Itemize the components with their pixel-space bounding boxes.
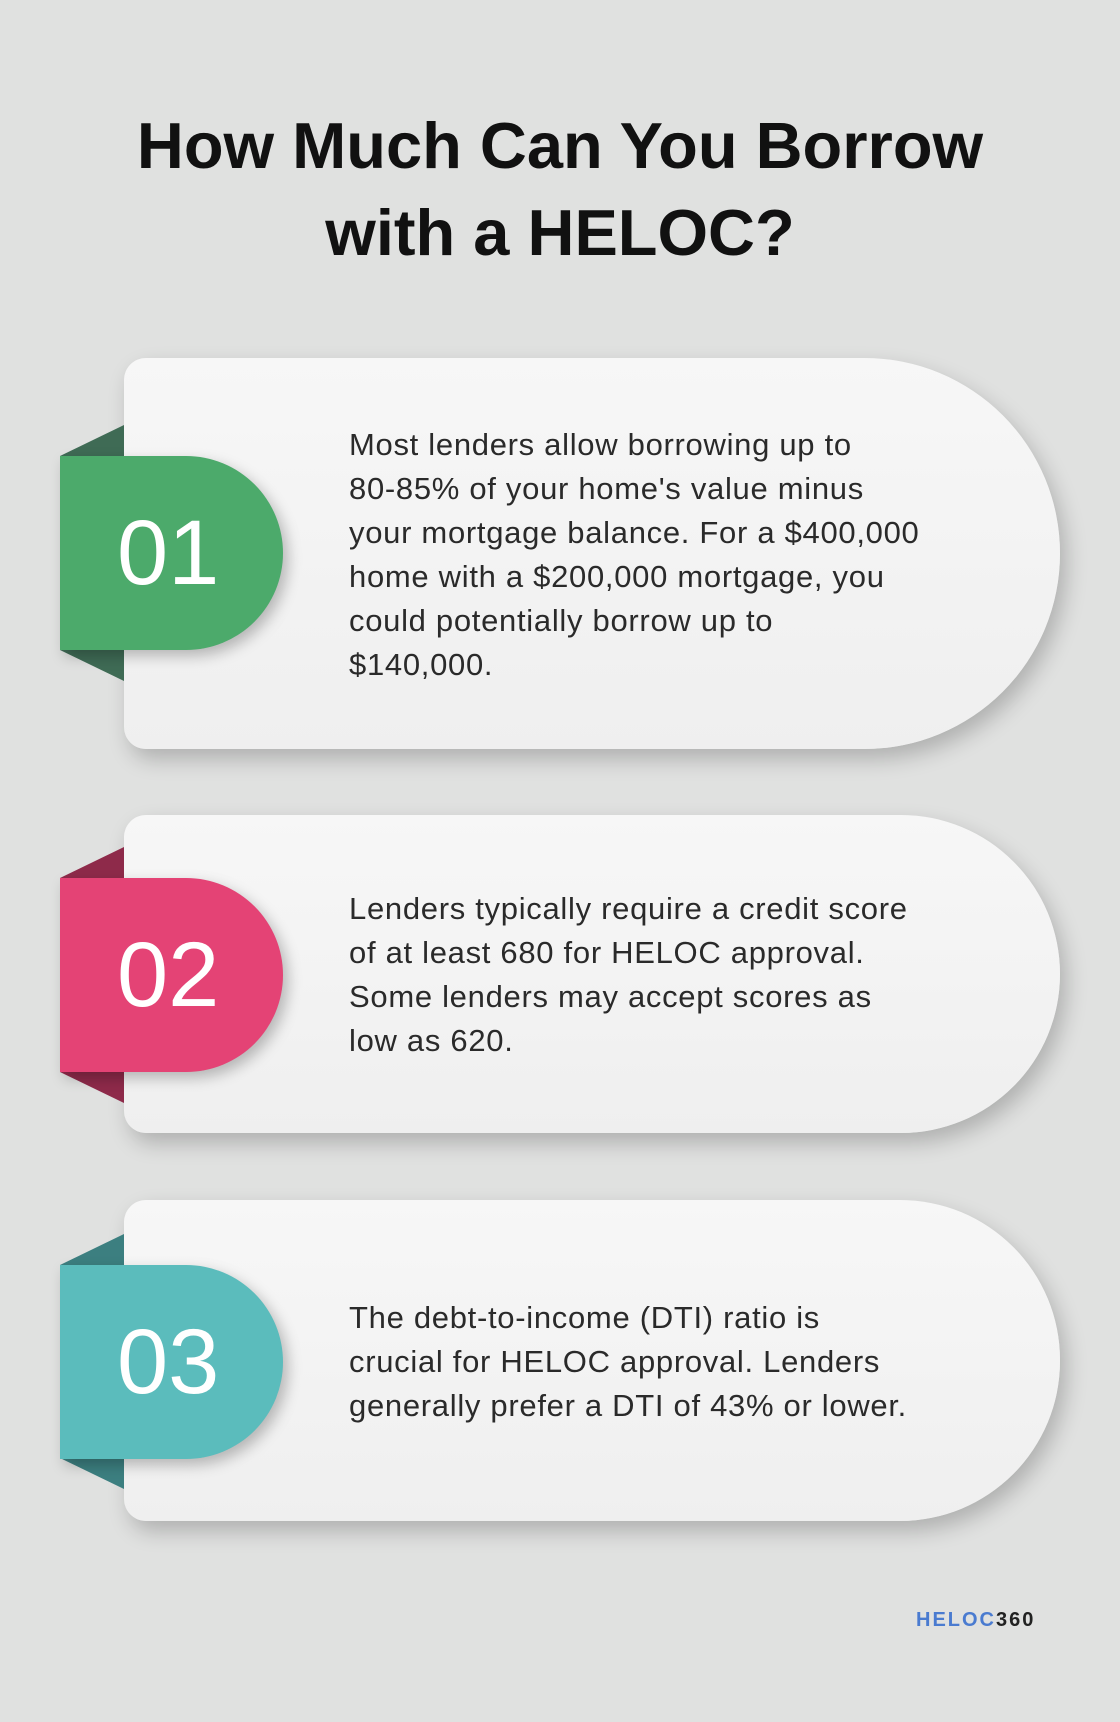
badge: 01 bbox=[60, 456, 283, 650]
title bbox=[137, 109, 984, 269]
text: step 1: $140,000. bbox=[349, 647, 493, 682]
fold: step 2 top bbox=[60, 847, 124, 878]
fold: step 1 top bbox=[60, 425, 124, 456]
badge: 03 bbox=[60, 1265, 283, 1459]
text: step 1: 80-85% of your home's value minus bbox=[349, 471, 864, 506]
panel: step 2 bbox=[124, 815, 1060, 1133]
text: step 3: The debt-to-income (DTI) ratio is bbox=[349, 1300, 820, 1335]
text: step 2: Lenders typically require a credit score bbox=[349, 891, 908, 926]
text: step 1: home with a $200,000 mortgage, you bbox=[349, 559, 885, 594]
text: step 3: crucial for HELOC approval. Lenders bbox=[349, 1344, 880, 1379]
badge: 02 bbox=[60, 878, 283, 1072]
text: step 1: Most lenders allow borrowing up to bbox=[349, 427, 852, 462]
panel: step 1 bbox=[124, 358, 1060, 749]
text: step 2: low as 620. bbox=[349, 1023, 514, 1058]
panel: step 3 bbox=[124, 1200, 1060, 1521]
text: step 2: of at least 680 for HELOC approval. bbox=[349, 935, 865, 970]
fold: step 3 top bbox=[60, 1234, 124, 1265]
badge: 03: 03 bbox=[117, 1311, 219, 1413]
logo: HELOC360 bbox=[916, 1609, 1035, 1631]
text: step 1 bbox=[349, 427, 919, 682]
text: step 3: generally prefer a DTI of 43% or lower. bbox=[349, 1388, 907, 1423]
text: step 1: your mortgage balance. For a $400,000 bbox=[349, 515, 919, 550]
text: step 2: Some lenders may accept scores as bbox=[349, 979, 872, 1014]
badge: 02: 02 bbox=[117, 924, 219, 1026]
fold: step 3 bottom bbox=[60, 1458, 124, 1489]
text: step 2 bbox=[349, 891, 908, 1058]
fold: step 2 bottom bbox=[60, 1072, 124, 1103]
badge: 01: 01 bbox=[117, 502, 219, 604]
text: step 1: could potentially borrow up to bbox=[349, 603, 773, 638]
title: with a HELOC? bbox=[325, 196, 795, 269]
text: step 3 bbox=[349, 1300, 907, 1423]
title: How Much Can You Borrow bbox=[137, 109, 983, 182]
fold: step 1 bottom bbox=[60, 650, 124, 681]
